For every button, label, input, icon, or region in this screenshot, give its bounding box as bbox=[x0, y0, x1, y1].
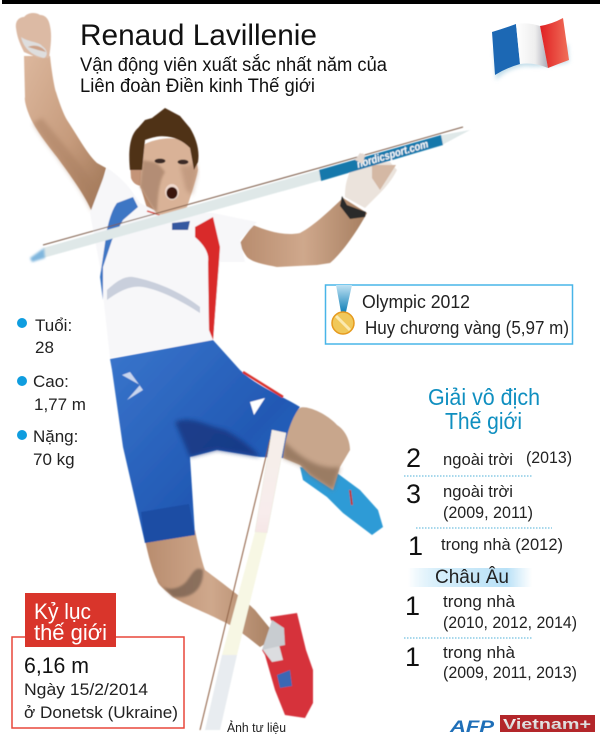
list: world championship results: (2009, 2011) bbox=[443, 504, 533, 522]
panel: world record bbox=[12, 593, 184, 728]
ear bbox=[130, 163, 143, 186]
stat: age: 28 bbox=[35, 338, 54, 357]
subtitle: Vận động viên xuất sắc nhất năm của bbox=[80, 54, 387, 76]
heading: world championships: Thế giới bbox=[445, 408, 522, 434]
icon: gold medal bbox=[332, 285, 354, 334]
athlete photo bbox=[16, 13, 470, 730]
chalked hand bbox=[345, 153, 397, 208]
photo credit: Ảnh tư liệu bbox=[227, 720, 286, 735]
list: world championship results: ngoài trời bbox=[443, 451, 513, 469]
world record heading bbox=[25, 593, 116, 647]
logo: Vietnam+ bbox=[500, 715, 595, 733]
horizontal pole bbox=[30, 127, 470, 262]
heading: Europe band bbox=[408, 566, 532, 588]
list: European results: (2009, 2011, 2013) bbox=[443, 664, 577, 682]
blue shoe bbox=[300, 467, 383, 535]
hair bbox=[129, 108, 199, 170]
logo: Vietnam+: Vietnam+ bbox=[503, 716, 591, 733]
stat: weight bbox=[17, 427, 78, 469]
panel: world record: 6,16 m bbox=[24, 653, 89, 678]
shorts bbox=[110, 340, 300, 543]
world record heading: thế giới bbox=[34, 620, 107, 645]
list: world championship results bbox=[404, 443, 572, 561]
list: world championship results: 1 bbox=[408, 531, 423, 561]
icon: French flag bbox=[492, 18, 569, 80]
face bbox=[140, 138, 198, 215]
arm to the bar bbox=[240, 198, 367, 267]
head bbox=[129, 108, 199, 215]
list: world championship results: ngoài trời bbox=[443, 483, 513, 501]
panel: world record: Ngày 15/2/2014 bbox=[24, 680, 148, 699]
wrist band bbox=[340, 196, 366, 219]
subtitle: Liên đoàn Điền kinh Thế giới bbox=[80, 76, 315, 97]
list: European results: 1 bbox=[405, 642, 420, 672]
heading: world championships: Giải vô địch bbox=[428, 384, 540, 410]
stat: weight: 70 kg bbox=[33, 450, 75, 469]
world record heading: Kỷ lục bbox=[34, 599, 91, 624]
panel: personal stats bbox=[17, 316, 86, 469]
panel: Olympic medal bbox=[326, 285, 572, 344]
heading: world championships bbox=[428, 384, 540, 434]
knee shadow bbox=[158, 569, 203, 597]
red shoe bbox=[262, 613, 313, 718]
list: European results: (2010, 2012, 2014) bbox=[443, 614, 577, 632]
vertical pole bbox=[200, 430, 286, 730]
jersey bbox=[90, 168, 257, 358]
stat: height: 1,77 m bbox=[34, 395, 86, 414]
title: Renaud Lavillenie bbox=[80, 19, 317, 52]
stat: age bbox=[17, 316, 72, 357]
list: European results bbox=[404, 591, 577, 682]
list: world championship results: (2013) bbox=[526, 449, 572, 467]
shorts logo bbox=[250, 398, 265, 415]
panel: world record: ở Donetsk (Ukraine) bbox=[24, 703, 178, 722]
raised arm bbox=[24, 56, 106, 212]
panel: Olympic medal: Huy chương vàng (5,97 m) bbox=[365, 318, 569, 338]
list: European results: 1 bbox=[405, 591, 420, 621]
list: world championship results: trong nhà (2012) bbox=[441, 536, 563, 554]
back leg thigh and calf bbox=[145, 530, 277, 647]
subtitle bbox=[80, 54, 387, 97]
finger tips bbox=[355, 153, 365, 164]
heading: Europe band: Châu Âu bbox=[435, 566, 509, 588]
stat: height bbox=[17, 372, 86, 414]
stat: age: Tuổi: bbox=[35, 316, 72, 335]
stat: weight: Nặng: bbox=[33, 427, 78, 446]
list: European results: trong nhà bbox=[443, 593, 516, 611]
horizontal pole: nordicsport.com bbox=[355, 138, 430, 171]
list: world championship results: 2 bbox=[406, 443, 421, 473]
panel: Olympic medal: Olympic 2012 bbox=[362, 292, 470, 312]
list: world championship results: 3 bbox=[406, 479, 421, 509]
list: European results: trong nhà bbox=[443, 644, 516, 662]
neck bbox=[140, 185, 185, 218]
top black bar bbox=[2, 0, 600, 4]
eyes and mouth bbox=[154, 159, 188, 200]
fist bbox=[16, 13, 51, 58]
front thigh bbox=[283, 407, 350, 490]
logo: AFP: AFP bbox=[449, 717, 495, 736]
stat: height: Cao: bbox=[33, 372, 69, 391]
